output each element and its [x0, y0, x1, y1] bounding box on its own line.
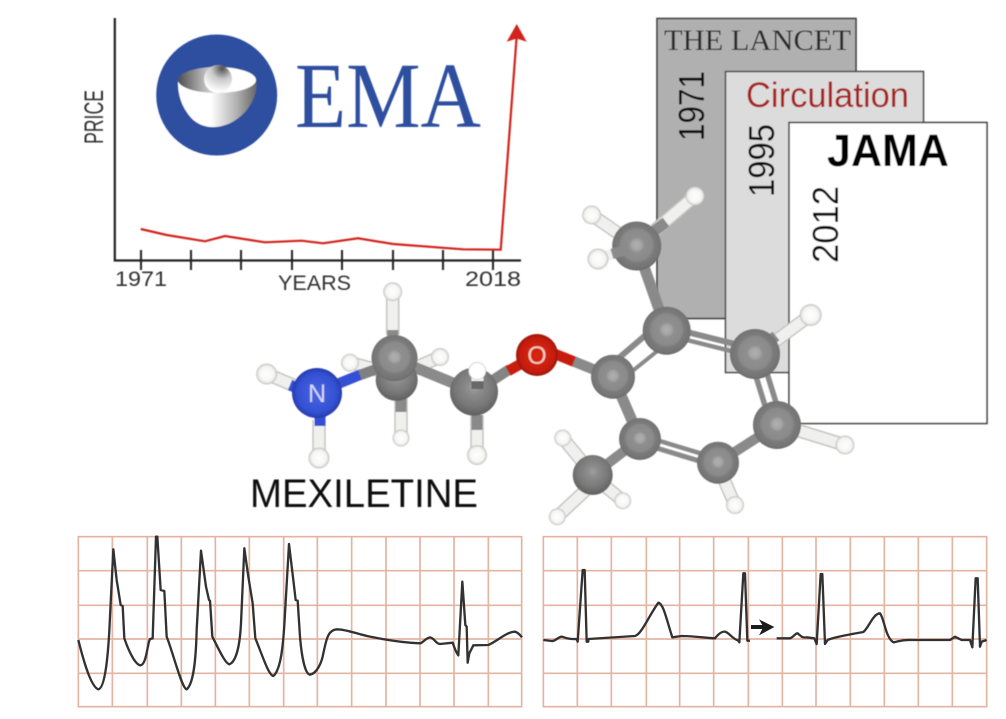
- bond: gray stub in front of methyl: [612, 249, 628, 254]
- card: JAMA: [789, 122, 987, 424]
- hydrogen bonds: [267, 196, 845, 517]
- atom: nitrogen: N: [308, 380, 326, 408]
- ECG grid: [78, 537, 522, 707]
- EMA logo: [156, 34, 481, 156]
- atom: carbon rear: [376, 359, 418, 401]
- logo bowl opening: [178, 67, 256, 93]
- atoms: ring carbons: [591, 307, 801, 484]
- atom: nitrogen: [292, 368, 342, 418]
- axis label: 1971: 1971: [115, 268, 167, 291]
- back hydrogens: [341, 206, 601, 446]
- bond: hydrogen in front of methyl: [598, 253, 615, 259]
- red arrowhead: [507, 24, 527, 42]
- logo wordmark: EMA: [295, 45, 481, 148]
- ECG trace: [78, 537, 522, 689]
- ECG trace after arrow: [777, 574, 987, 647]
- chart axes and ticks: [115, 18, 521, 270]
- card: Circulation: Circulation: [746, 76, 909, 115]
- axis label: 2018: 2018: [465, 268, 521, 291]
- logo sphere: [204, 65, 232, 93]
- atom: carbon chain 2: [450, 368, 498, 416]
- N-C and O bonds: [335, 352, 600, 385]
- panel: price chart: [79, 18, 527, 295]
- carbon chain and ring bonds: [397, 246, 783, 475]
- card: JAMA: 2012: [805, 186, 846, 263]
- front hydrogens: [256, 186, 854, 525]
- logo bowl: [178, 67, 256, 127]
- ECG grid: [543, 537, 987, 707]
- panel: journal cards: [657, 18, 987, 424]
- panel: ECG normal rhythm: [543, 537, 987, 707]
- card: The Lancet: [657, 18, 856, 318]
- molecule name: MEXILETINE: [250, 472, 478, 516]
- panel: ECG arrhythmia: [78, 537, 522, 707]
- arrow: [751, 619, 774, 635]
- logo ring: [156, 34, 277, 156]
- card: The Lancet: 1971: [671, 71, 712, 141]
- ECG trace before arrow: [543, 570, 750, 642]
- atom: carbon chain 1: [372, 335, 418, 381]
- axis label: years: YEARS: [278, 272, 351, 295]
- atom: oxygen: [516, 334, 558, 376]
- molecule: mexiletine: [250, 186, 854, 525]
- card: Circulation: [726, 72, 924, 372]
- axis label: price: PRICE: [79, 90, 109, 144]
- atom: front hydrogen on chain: [469, 362, 486, 389]
- red price line: [141, 36, 517, 250]
- atom: oxygen: O: [527, 342, 547, 370]
- atom: carbon methyl bottom: [573, 455, 613, 495]
- card: Circulation: 1995: [741, 124, 782, 197]
- card: JAMA: JAMA: [827, 125, 949, 176]
- atom: carbon methyl top: [612, 222, 661, 270]
- card: The Lancet: THE LANCET: [664, 24, 851, 57]
